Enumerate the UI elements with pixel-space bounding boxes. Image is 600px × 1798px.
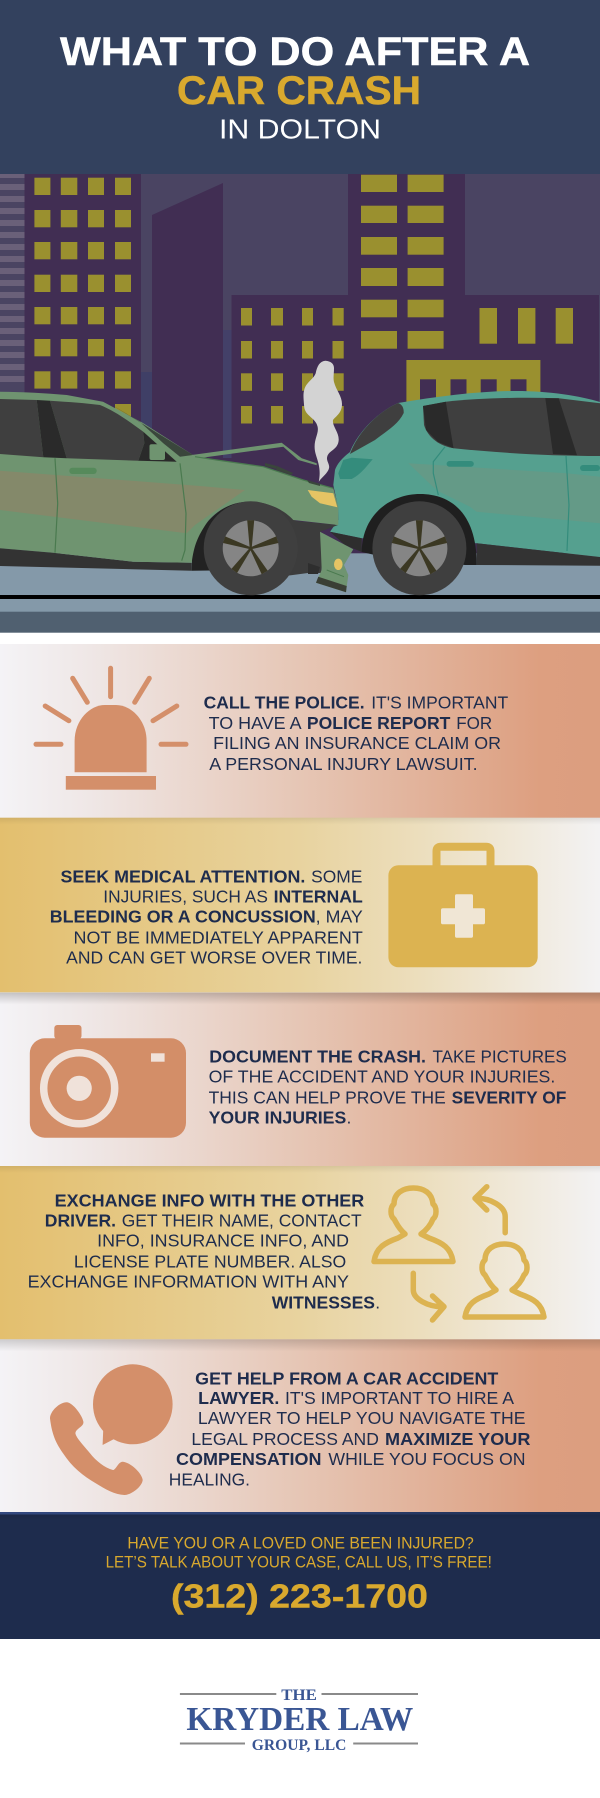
text: call the police: FOR [456,713,492,733]
text: get help from a lawyer [169,1368,531,1490]
text: document the crash [209,1046,567,1127]
panel: document the crash [0,992,600,1166]
text: exchange info: DRIVER. [45,1211,116,1231]
broken bumper [316,532,353,592]
person 2 [465,1244,544,1317]
road [0,553,600,633]
text: call the police: TO HAVE A [209,713,302,733]
city skyline [0,174,600,574]
call to action text [106,1534,492,1571]
text: document the crash: THIS CAN HELP PROVE THE [209,1087,446,1107]
rear wheel [372,501,466,595]
text: call the police [204,692,508,774]
text: seek medical attention: INTERNAL [274,886,363,906]
text: get help from a lawyer: IT'S IMPORTANT TO HIRE A [285,1388,514,1408]
text: document the crash: SEVERITY OF [452,1087,567,1107]
teal car [330,391,600,566]
text: get help from a lawyer: MAXIMIZE YOUR [385,1429,531,1449]
smoke [303,361,342,482]
title line 2: CAR CRASH [177,69,421,113]
icon: first aid kit [388,847,538,967]
text: get help from a lawyer: COMPENSATION [176,1449,322,1469]
text: document the crash: YOUR INJURIES [209,1107,346,1127]
front wheel [204,501,298,595]
header panel [0,0,600,174]
logo: the kryder law group [180,1687,418,1754]
text: call the police: POLICE REPORT [307,713,451,733]
panel: seek medical attention [0,818,600,992]
text: document the crash: TAKE PICTURES [432,1046,567,1066]
icon: phone and speech bubble [50,1364,173,1495]
text: call the police: CALL THE POLICE. [204,692,365,712]
arrow down-right [413,1273,444,1320]
title line 1: WHAT TO DO AFTER A [60,30,530,74]
text: call the police: A PERSONAL INJURY LAWSUIT. [209,754,478,774]
text: get help from a lawyer: GET HELP FROM A CAR ACCIDENT [195,1368,499,1388]
logo: the kryder law group: THE [281,1687,317,1704]
text: seek medical attention: NOT BE IMMEDIATELY APPARENT [74,927,363,947]
text: exchange info: LICENSE PLATE NUMBER. ALSO [74,1252,346,1272]
panel: exchange info [0,1166,600,1339]
call to action panel [0,1512,600,1639]
text: document the crash: OF THE ACCIDENT AND YOUR INJURIES. [209,1066,555,1086]
icon: siren [36,668,186,790]
illustration: car crash in city [0,174,600,633]
logo: the kryder law group: GROUP, LLC [252,1737,346,1754]
person 1 [374,1188,453,1262]
text: document the crash: . [346,1107,351,1127]
text: exchange info: . [375,1292,380,1312]
text: seek medical attention: SEEK MEDICAL ATTENTION. [60,866,305,886]
icon: camera [30,1025,186,1138]
text: exchange info: INFO, INSURANCE INFO, AND [97,1231,349,1251]
text: seek medical attention: BLEEDING OR A CONCUSSION [50,906,316,926]
panel: call the police [0,644,600,818]
text: get help from a lawyer: LAWYER TO HELP YOU NAVIGATE THE [198,1408,526,1428]
text: exchange info [28,1191,380,1312]
text: exchange info: WITNESSES [272,1292,375,1312]
call to action text: HAVE YOU OR A LOVED ONE BEEN INJURED? [127,1534,474,1552]
icon: two people exchanging [374,1187,544,1320]
phone number: (312) 223-1700 [171,1577,428,1614]
text: call the police: FILING AN INSURANCE CLAIM OR [213,733,501,753]
green car [0,392,338,580]
text: exchange info: EXCHANGE INFO WITH THE OTHER [55,1191,365,1211]
text: seek medical attention [50,866,363,967]
text: seek medical attention: AND CAN GET WORSE OVER TIME. [66,947,362,967]
text: seek medical attention: INJURIES, SUCH AS [103,886,268,906]
subtitle: IN DOLTON [219,114,381,145]
call to action text: LET’S TALK ABOUT YOUR CASE, CALL US, IT’S FREE! [106,1553,492,1571]
arrow up-left [475,1187,505,1233]
text: exchange info: EXCHANGE INFORMATION WITH ANY [28,1272,349,1292]
text: seek medical attention: SOME [311,866,362,886]
logo: the kryder law group: KRYDER LAW [186,1701,413,1738]
text: seek medical attention: , MAY [316,906,363,926]
panel: get help from a lawyer [0,1339,600,1512]
text: get help from a lawyer: LAWYER. [198,1388,279,1408]
text: get help from a lawyer: HEALING. [169,1470,250,1490]
text: get help from a lawyer: WHILE YOU FOCUS ON [328,1449,526,1469]
text: exchange info: GET THEIR NAME, CONTACT [122,1211,362,1231]
text: get help from a lawyer: LEGAL PROCESS AND [191,1429,379,1449]
text: call the police: IT'S IMPORTANT [371,692,508,712]
text: document the crash: DOCUMENT THE CRASH. [209,1046,426,1066]
